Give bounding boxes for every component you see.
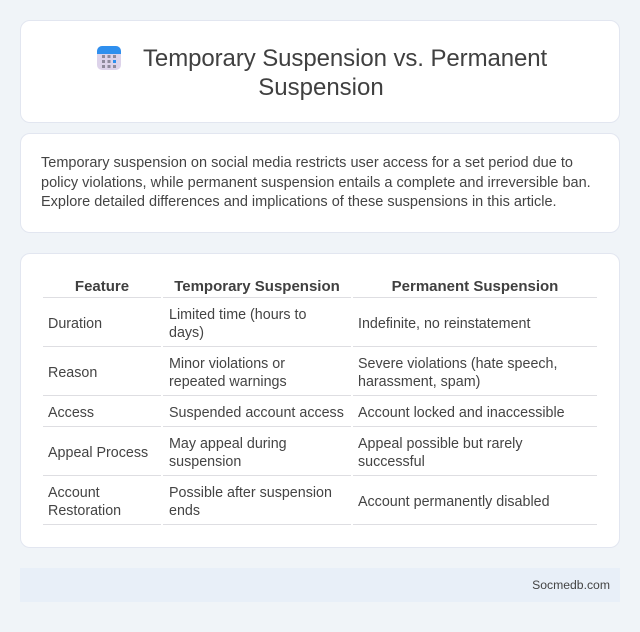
intro text: Temporary suspension on social media restricts user access for a set period due to [41, 155, 573, 171]
panel: title header [20, 20, 620, 123]
row: appeal process: Appeal Process [48, 445, 148, 461]
row: appeal process: successful [358, 454, 425, 470]
table header [75, 278, 558, 295]
row: appeal process [48, 436, 523, 470]
table header: Permanent Suspension [392, 278, 558, 295]
row: access: Account locked and inaccessible [358, 405, 565, 421]
panel: footer [20, 568, 620, 602]
table header: Feature [75, 278, 129, 295]
row: reason: harassment, spam) [358, 374, 480, 390]
row: account restoration: ends [169, 503, 200, 519]
row: reason: Reason [48, 365, 97, 381]
panel: comparison table [20, 253, 620, 548]
row: access: Suspended account access [169, 405, 344, 421]
title: Temporary Suspension vs. Permanent [143, 45, 547, 72]
row: account restoration: Account permanently disabled [358, 494, 550, 510]
intro text: Explore detailed differences and implications of these suspensions in this article. [41, 194, 557, 210]
intro text [41, 155, 591, 210]
row: access [48, 405, 565, 421]
icon: calendar [97, 46, 121, 70]
title: Suspension [258, 74, 384, 101]
row: account restoration: Account [48, 485, 100, 501]
row: duration: days) [169, 325, 204, 341]
footer source text: Socmedb.com [532, 578, 610, 592]
row: duration [48, 307, 530, 341]
intro text: policy violations, while permanent suspension entails a complete and irreversible ban. [41, 174, 591, 190]
row: account restoration: Possible after suspension [169, 485, 332, 501]
row: access: Access [48, 405, 94, 421]
row: duration: Indefinite, no reinstatement [358, 316, 530, 332]
row: reason: Severe violations (hate speech, [358, 356, 557, 372]
row: appeal process: suspension [169, 454, 241, 470]
row: account restoration: Restoration [48, 503, 121, 519]
row: reason [48, 356, 557, 390]
row: appeal process: Appeal possible but rarely [358, 436, 523, 452]
row: account restoration [48, 485, 550, 519]
row: duration: Limited time (hours to [169, 307, 306, 323]
row: reason: Minor violations or [169, 356, 285, 372]
table header: Temporary Suspension [174, 278, 340, 295]
title [143, 45, 547, 101]
row: duration: Duration [48, 316, 102, 332]
row: reason: repeated warnings [169, 374, 287, 390]
row: appeal process: May appeal during [169, 436, 287, 452]
panel: introduction [20, 133, 620, 233]
